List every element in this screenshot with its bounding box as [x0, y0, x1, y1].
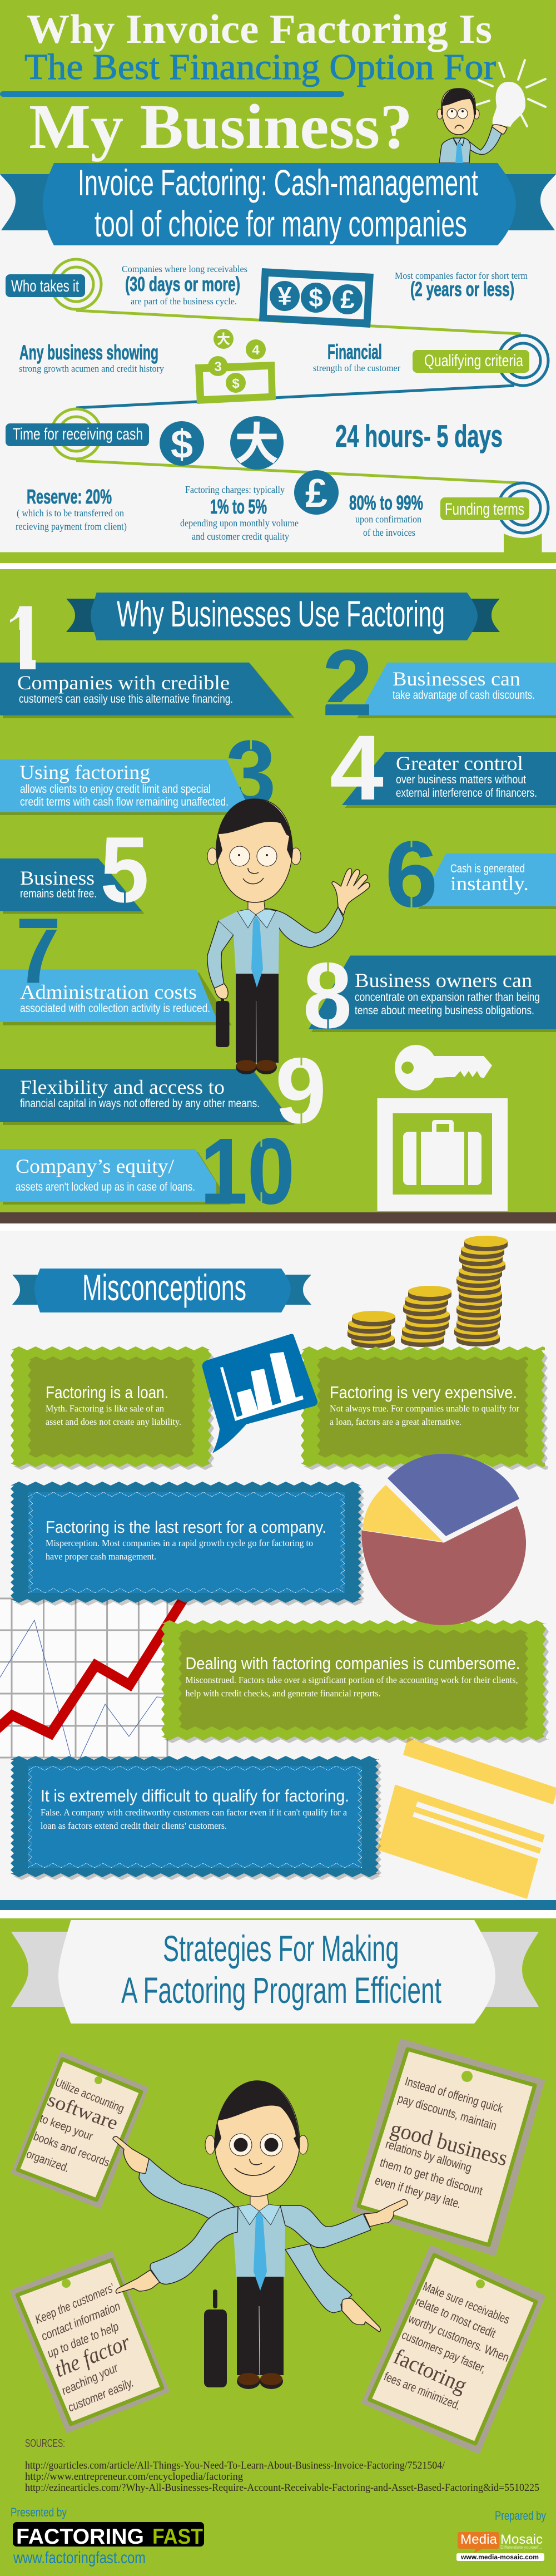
step: time for receiving cash: [6, 409, 149, 459]
reason 10: 10: [200, 1119, 295, 1223]
panel: difficult to qualify: It is extremely difficult to qualify for factoring.: [41, 1786, 349, 1805]
logo: media mosaic: Media: [460, 2532, 498, 2547]
card: accounting software: books and records: [32, 2130, 111, 2169]
sources: http://ezinearticles.com/?Why-All-Businesses-Require-Account-Receivable-Factoring-and-Asset-Based-Factoring&id=5510225: [25, 2482, 539, 2494]
reason 2: [322, 630, 556, 735]
reason 7: 7: [16, 900, 61, 1003]
reason 4: over business matters without: [396, 773, 526, 786]
card: customers' contact information: the factor: [51, 2329, 133, 2382]
banner: cash-management tool: [0, 162, 556, 245]
card: good business relations: [352, 2040, 544, 2255]
main title: Why Invoice Factoring Is: [27, 7, 492, 52]
logo: factoring fast: www.factoringfast.com: [13, 2549, 146, 2567]
face: [216, 799, 292, 902]
character: four-armed businessman: [113, 2081, 408, 2389]
neck: [250, 2195, 269, 2212]
panel: last resort: have proper cash management.: [46, 1551, 156, 1562]
hair: [216, 799, 293, 862]
reason 3: credit terms with cash flow remaining unaffected.: [20, 796, 229, 808]
logo: media mosaic: Mosaic: [500, 2532, 543, 2547]
reason 2: Businesses can: [393, 668, 520, 690]
icon: key: [395, 1045, 492, 1090]
eyes: [230, 2134, 282, 2156]
reason 3: allows clients to enjoy credit limit and special: [20, 783, 211, 796]
text: advance rate: 80% to 99%: [349, 491, 423, 514]
panel: factoring is very expensive: a loan, factors are a great alternative.: [330, 1417, 461, 1427]
trousers: [237, 2276, 284, 2375]
collar: [238, 2204, 280, 2225]
reason 3: Using factoring: [19, 761, 150, 783]
ears: [207, 848, 301, 865]
card: credit-worthy receivables: [363, 2246, 544, 2453]
step: funding terms: [440, 483, 548, 552]
card: customers' contact information: contact information: [39, 2299, 122, 2343]
text: any business showing: Any business showing: [19, 341, 158, 364]
reason 7: associated with collection activity is reduced.: [20, 1002, 210, 1015]
card: credit-worthy receivables: relate to most credit: [414, 2294, 498, 2341]
card: customers' contact information: up to date to help: [46, 2320, 121, 2361]
logo: factoring fast: FAST: [152, 2525, 203, 2549]
card: good business relations: good business: [388, 2115, 510, 2171]
card: credit-worthy receivables: worthy customers. When: [406, 2311, 511, 2365]
text: factoring charges: 1% to 5%: [210, 495, 267, 518]
panel: cumbersome: Misconstrued. Factors take over a significant portion of the accounting work for their clients,: [186, 1675, 518, 1685]
reason 10: assets aren't locked up as in case of loans.: [16, 1181, 195, 1193]
text: factoring charges: [180, 484, 299, 542]
card: good business relations: them to get the discount: [379, 2155, 484, 2198]
tie: [251, 916, 263, 988]
heading banner: strategies: Strategies For Making: [163, 1928, 399, 1969]
icon: green bill with coins: [195, 329, 276, 404]
hand holding case: [215, 984, 228, 999]
sources: http://www.entrepreneur.com/encyclopedia/factoring: [25, 2471, 243, 2483]
card: accounting software: Utilize accounting: [53, 2076, 126, 2115]
ears: [205, 2135, 308, 2154]
reason 1: [0, 606, 295, 718]
hand upper right: [364, 2199, 408, 2227]
reason 9: financial capital in ways not offered by any other means.: [20, 1097, 260, 1110]
nose and smile: [235, 2159, 275, 2175]
illustration: credit card: [378, 1738, 556, 1899]
text: any business showing: [19, 341, 164, 374]
heading banner: misconceptions: [12, 1267, 311, 1312]
panel: last resort: Factoring is the last resort for a company.: [46, 1517, 326, 1537]
icon: framed suitcase: [377, 1098, 508, 1211]
reason 10: Company’s equity/: [16, 1155, 174, 1177]
panel: difficult to qualify: False. A company with creditworthy customers can factor even if it can't qualify for a: [41, 1807, 347, 1818]
arm left: [207, 921, 234, 989]
reason 3: [0, 721, 276, 826]
character: businessman waving: [207, 799, 370, 1074]
card: credit-worthy receivables: Make sure receivables: [421, 2279, 512, 2327]
sources: http://goarticles.com/article/All-Things-You-Need-To-Learn-About-Business-Invoice-Factoring/7521504/: [25, 2460, 445, 2471]
step: qualifying criteria: Qualifying criteria: [424, 352, 523, 370]
text: factoring charges: depending upon monthly volume: [180, 517, 299, 529]
heading banner: why businesses use factoring: [66, 593, 500, 640]
panel: last resort: Misperception. Most companies in a rapid growth cycle go for factoring to: [46, 1538, 313, 1548]
reason 5: Business: [20, 867, 95, 889]
card: customers' contact information: Keep the customers': [33, 2281, 116, 2327]
main title: The Best Financing Option For: [24, 47, 496, 87]
panel: difficult to qualify: loan as factors extend credit their clients' customers.: [41, 1820, 227, 1831]
panel: cumbersome: [161, 1620, 549, 1743]
panel: factoring is a loan: Myth. Factoring is like sale of an: [46, 1403, 164, 1414]
text: long receivables: [122, 264, 247, 307]
arm lower right: [285, 2244, 352, 2313]
torso: [234, 2205, 285, 2277]
text: short term: Most companies factor for short term: [395, 270, 528, 281]
main title: [0, 7, 496, 162]
briefcase: [216, 990, 229, 1047]
panel: last resort: [11, 1482, 364, 1606]
icon: green bill with coins: 大: [217, 332, 230, 347]
sources: [25, 2437, 539, 2494]
text: short term: [395, 270, 528, 300]
text: long receivables: are part of the business cycle.: [131, 296, 237, 307]
logo: factoring fast: FACTORING: [16, 2525, 144, 2549]
hand lower right: [342, 2298, 380, 2332]
icon: chat bubble with bars: [202, 1334, 317, 1453]
hand upper left: [113, 2136, 149, 2173]
text: factoring charges: Factoring charges: typically: [185, 484, 285, 495]
reason 8: Business owners can: [355, 969, 532, 991]
reason 6: Cash is generated: [450, 862, 525, 875]
card: customers' contact information: [11, 2252, 168, 2432]
card: credit-worthy receivables: fees are minimized.: [382, 2369, 463, 2412]
icon: green bill with coins: 4: [252, 343, 260, 358]
reason 9: [0, 1038, 326, 1143]
text: long receivables: (30 days or more): [125, 273, 240, 295]
torso: [219, 909, 279, 974]
card: accounting software: [12, 2053, 147, 2208]
card: credit-worthy receivables: factoring: [390, 2343, 471, 2398]
card: customers' contact information: customer easily.: [66, 2376, 136, 2415]
panel: factoring is very expensive: Factoring is very expensive.: [330, 1383, 517, 1402]
text: factoring charges: and customer credit quality: [192, 531, 289, 542]
chart: pie: [361, 1454, 526, 1625]
briefcase: [204, 2289, 227, 2387]
reason 7: [0, 900, 232, 1025]
panel: factoring is very expensive: [301, 1346, 548, 1470]
icon: green bill with coins: $: [232, 376, 240, 391]
panel: factoring is a loan: asset and does not create any liability.: [46, 1417, 181, 1427]
reason 8: [303, 943, 556, 1048]
step: qualifying criteria: [413, 335, 548, 386]
card: customers' contact information: reaching your: [59, 2360, 121, 2398]
face: [215, 2081, 300, 2197]
reason 1: customers can easily use this alternative financing.: [19, 693, 233, 705]
reason 9: 9: [275, 1038, 326, 1143]
panel: cumbersome: Dealing with factoring companies is cumbersome.: [186, 1654, 520, 1673]
card: accounting software: organized.: [24, 2148, 71, 2175]
arm lower left: [150, 2207, 238, 2284]
reason 3: 3: [226, 721, 276, 826]
reason 4: 4: [330, 717, 384, 820]
panel: factoring is a loan: [11, 1346, 214, 1470]
main title: My Business?: [29, 91, 413, 162]
icon: bill with currency: ¥: [277, 282, 292, 310]
card: accounting software: to keep your: [38, 2112, 95, 2143]
panel: cumbersome: help with credit checks, and generate financial reports.: [186, 1688, 380, 1699]
icons: currency coins: $: [171, 422, 193, 467]
logo: media mosaic: [456, 2509, 546, 2561]
card: good business relations: even if they pay late.: [374, 2173, 463, 2211]
hair: [214, 2081, 299, 2150]
text: reserve: [16, 485, 127, 532]
icon: bill with currency: [259, 268, 374, 328]
text: long receivables: Companies where long receivables: [122, 264, 247, 274]
reason 8: 8: [303, 943, 352, 1048]
hand waving: [332, 868, 370, 915]
text: reserve: ( which is to be transferred on: [17, 507, 124, 519]
panel: factoring is a loan: Factoring is a loan.: [46, 1383, 168, 1402]
process path lines: [76, 310, 521, 483]
text: advance rate: [349, 491, 423, 538]
arm upper left: [139, 2159, 235, 2218]
icons: currency coins: £: [305, 471, 327, 516]
reason 7: Administration costs: [20, 981, 197, 1003]
icons: currency coins: [160, 416, 339, 516]
card: credit-worthy receivables: customers pay faster,: [400, 2328, 488, 2376]
nose and smile: [243, 868, 264, 884]
reason 6: 6: [385, 822, 438, 926]
text: financial strength: Financial: [327, 340, 382, 363]
text: any business showing: strong growth acumen and credit history: [19, 363, 164, 374]
card: good business relations: relations by allowing: [384, 2137, 473, 2175]
reason 5: remains debt free.: [20, 887, 97, 900]
text: reserve: recieving payment from client): [16, 521, 127, 532]
icons: currency coins: 大: [235, 420, 279, 469]
logo: media mosaic: www.media-mosaic.com: [460, 2553, 539, 2561]
logo: factoring fast: Presented by: [11, 2505, 67, 2519]
icon: bill with currency: $: [309, 283, 323, 312]
panel: factoring is very expensive: Not always true. For companies unable to qualify for: [330, 1403, 519, 1414]
icon: man with light bulb: [437, 60, 545, 163]
arm upper right: [280, 2205, 371, 2248]
text: financial strength: [313, 340, 400, 373]
step: time for receiving cash: Time for receiving cash: [13, 425, 143, 443]
reason 2: 2: [322, 630, 373, 735]
step: who takes it: [6, 259, 101, 309]
icon: green bill with coins: 3: [214, 359, 222, 374]
icon: bill with currency: £: [340, 285, 355, 314]
reason 5: [0, 817, 149, 922]
reason 4: [330, 717, 556, 820]
sources: SOURCES:: [25, 2437, 65, 2450]
logo: factoring fast: [11, 2505, 204, 2567]
heading banner: misconceptions: Misconceptions: [82, 1267, 246, 1308]
text: reserve: Reserve: 20%: [27, 485, 112, 508]
arm right: [265, 907, 344, 948]
hand lower left: [116, 2270, 160, 2293]
reason 10: [0, 1119, 295, 1223]
card: good business relations: Instead of offering quick: [404, 2074, 505, 2115]
collar: [237, 909, 276, 928]
text: advance rate: of the invoices: [363, 527, 415, 538]
reason 6: instantly.: [450, 872, 529, 895]
text: advance rate: upon confirmation: [355, 514, 421, 525]
illustration: coin stacks: [348, 1236, 508, 1348]
heading banner: strategies: [11, 1920, 539, 2024]
shoes: [237, 2373, 283, 2389]
step: who takes it: Who takes it: [11, 277, 79, 295]
trousers: [236, 974, 279, 1063]
reason 6: [385, 822, 556, 926]
panel: difficult to qualify: [11, 1756, 381, 1880]
text: financial strength: strength of the customer: [313, 363, 400, 373]
neck: [248, 901, 265, 915]
reason 9: Flexibility and access to: [20, 1076, 225, 1098]
reason 1: Companies with credible: [17, 672, 230, 694]
logo: media mosaic: Differentiate yourself...: [500, 2545, 542, 2550]
eyes: [230, 846, 277, 866]
tie: [254, 2211, 267, 2291]
card: accounting software: software: [44, 2089, 121, 2134]
reason 4: Greater control: [396, 752, 523, 774]
illustration: line chart: [0, 1595, 186, 1759]
step: funding terms: Funding terms: [445, 500, 524, 519]
shoes: [236, 1060, 277, 1074]
card: good business relations: pay discounts, maintain: [396, 2091, 498, 2133]
reason 5: 5: [100, 817, 149, 922]
